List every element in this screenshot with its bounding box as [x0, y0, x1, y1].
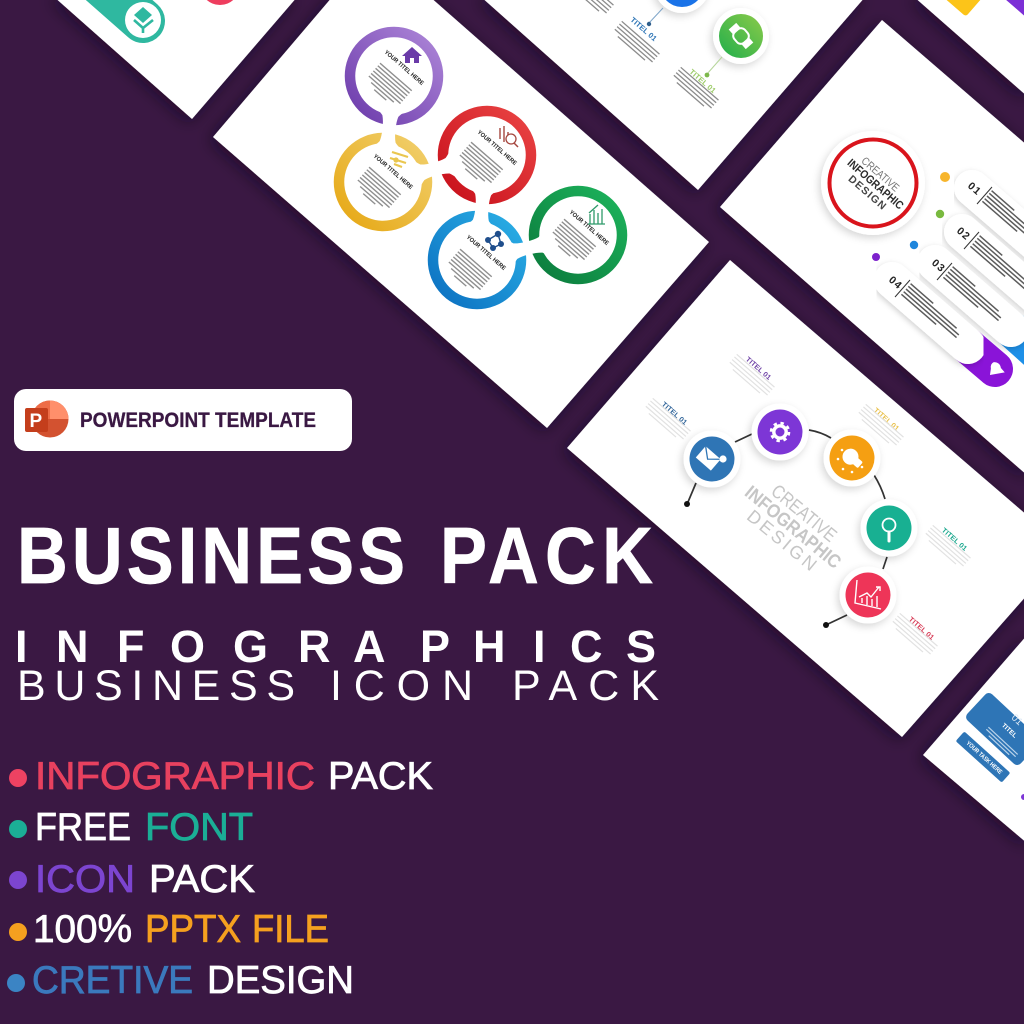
connector: purple to yellow [362, 100, 416, 158]
node: chart [840, 566, 896, 624]
item: 100% pptx file [9, 908, 329, 951]
connector arcs [688, 430, 887, 624]
red circle [200, 0, 240, 5]
creative infographic badge: INFOGRAPHIC [845, 157, 905, 212]
heading: business pack: BUSINESS [17, 511, 405, 600]
item: cretive design [7, 959, 354, 1002]
yellow block [943, 0, 983, 17]
item: infographic pack: PACK [328, 755, 433, 798]
connector: yellow to red [403, 139, 467, 199]
title: yellow: TITEL 01 [872, 407, 900, 433]
title: red: TITEL 01 [907, 616, 935, 642]
creative infographic badge [821, 131, 925, 235]
icon: PowerPoint logo [25, 400, 68, 438]
step 01 [965, 180, 1024, 264]
item: 100% pptx file: FILE [252, 908, 329, 951]
ring: yellow [339, 138, 427, 226]
blue text lines [613, 21, 659, 65]
ring: blue [433, 216, 521, 304]
item: icon pack: PACK [149, 858, 255, 901]
item: 100% pptx file: 100% [33, 908, 132, 951]
panel: ring infographic slide [213, 0, 709, 428]
panel: top-middle slide [480, 0, 866, 190]
item: icon pack [9, 858, 255, 901]
node: gear [752, 404, 808, 460]
lines: red [891, 613, 937, 657]
green node [705, 8, 769, 77]
lines: blue [644, 398, 690, 442]
yellow ring content [353, 152, 413, 213]
end dot left [684, 501, 690, 507]
icon: PowerPoint logo: P [30, 411, 42, 432]
centre wordmark: CREATIVE [767, 481, 840, 547]
end dot bottom [823, 622, 829, 628]
subheading: business icon pack: ICON [330, 662, 473, 710]
icon: bell [988, 361, 1005, 375]
subheading: business icon pack: PACK [512, 662, 659, 710]
step 04: 04 [886, 274, 904, 292]
red ring content: YOUR TITEL HERE [476, 130, 517, 167]
centre wordmark: INFOGRAPHIC [740, 482, 845, 574]
purple dot [1021, 794, 1024, 800]
heading: business pack: PACK [440, 511, 653, 600]
panel: red circle slide [720, 20, 1024, 476]
item: free font: FREE [35, 806, 131, 849]
red ring content [455, 126, 518, 188]
feature list [7, 755, 433, 1002]
purple ring content: YOUR TITEL HERE [383, 50, 424, 87]
subheading: business icon pack [17, 662, 659, 710]
item: infographic pack [9, 755, 433, 798]
connector: red to blue [456, 179, 508, 236]
creative infographic badge: DESIGN [846, 173, 888, 212]
blue card [964, 691, 1024, 767]
panel: top-left slide [53, 0, 298, 119]
task bar [956, 731, 1010, 783]
green title: TITEL 01 [688, 67, 718, 95]
item: free font [9, 806, 253, 849]
green ring content [548, 205, 609, 265]
green ring content: YOUR TITEL HERE [568, 210, 609, 247]
grey text lines [567, 0, 613, 16]
node: magnifier [860, 500, 918, 556]
connector: blue to green [496, 218, 560, 278]
purple block [998, 0, 1024, 26]
subheading: infographics: INFOGRAPHICS [15, 621, 656, 672]
lines: teal [924, 525, 970, 569]
badge: PowerPoint template [14, 389, 352, 451]
purple ring content [364, 47, 424, 109]
item: 100% pptx file: PPTX [145, 908, 241, 951]
step 04 [886, 274, 1005, 375]
teal pill with icon [85, 0, 161, 38]
creative infographic badge: CREATIVE [859, 155, 901, 194]
blue card: TITEL [1000, 722, 1018, 740]
yellow ring content: YOUR TITEL HERE [372, 154, 413, 191]
node: light bulb [824, 430, 880, 486]
blue ring content: YOUR TITEL HERE [465, 235, 506, 272]
blue node [647, 0, 710, 26]
ring: red [443, 111, 531, 199]
title: blue: TITEL 01 [660, 401, 688, 427]
blue title: TITEL 01 [629, 15, 659, 43]
step 03 [929, 257, 1024, 355]
title: teal: TITEL 01 [940, 527, 968, 553]
heading: business pack [17, 511, 653, 600]
dots [872, 172, 950, 261]
blue ring content [444, 231, 506, 295]
lines: yellow [857, 404, 903, 448]
ring: purple [350, 32, 438, 120]
step 01: 01 [965, 180, 983, 198]
item: cretive design: DESIGN [207, 959, 354, 1002]
lines: purple [728, 354, 774, 398]
item: free font: FONT [145, 806, 253, 849]
ring: green [534, 191, 622, 279]
step 02: 02 [954, 225, 972, 243]
node: envelope [684, 430, 740, 488]
panel: curved path slide [567, 260, 1024, 737]
subheading: business icon pack: BUSINESS [17, 662, 295, 710]
item: icon pack: ICON [35, 858, 135, 901]
item: infographic pack: INFOGRAPHIC [35, 755, 315, 798]
panel: top-right slide [913, 0, 1024, 97]
panel: bottom-right slide [923, 634, 1024, 844]
badge label: POWERPOINT TEMPLATE [80, 409, 316, 432]
title: purple: TITEL 01 [744, 356, 772, 382]
step 02 [954, 225, 1024, 317]
green text lines [672, 67, 718, 111]
centre wordmark: DESIGN [743, 506, 821, 575]
item: cretive design: CRETIVE [32, 959, 193, 1002]
step 03: 03 [929, 257, 947, 275]
task bar: YOUR TASK HERE [965, 740, 1003, 776]
